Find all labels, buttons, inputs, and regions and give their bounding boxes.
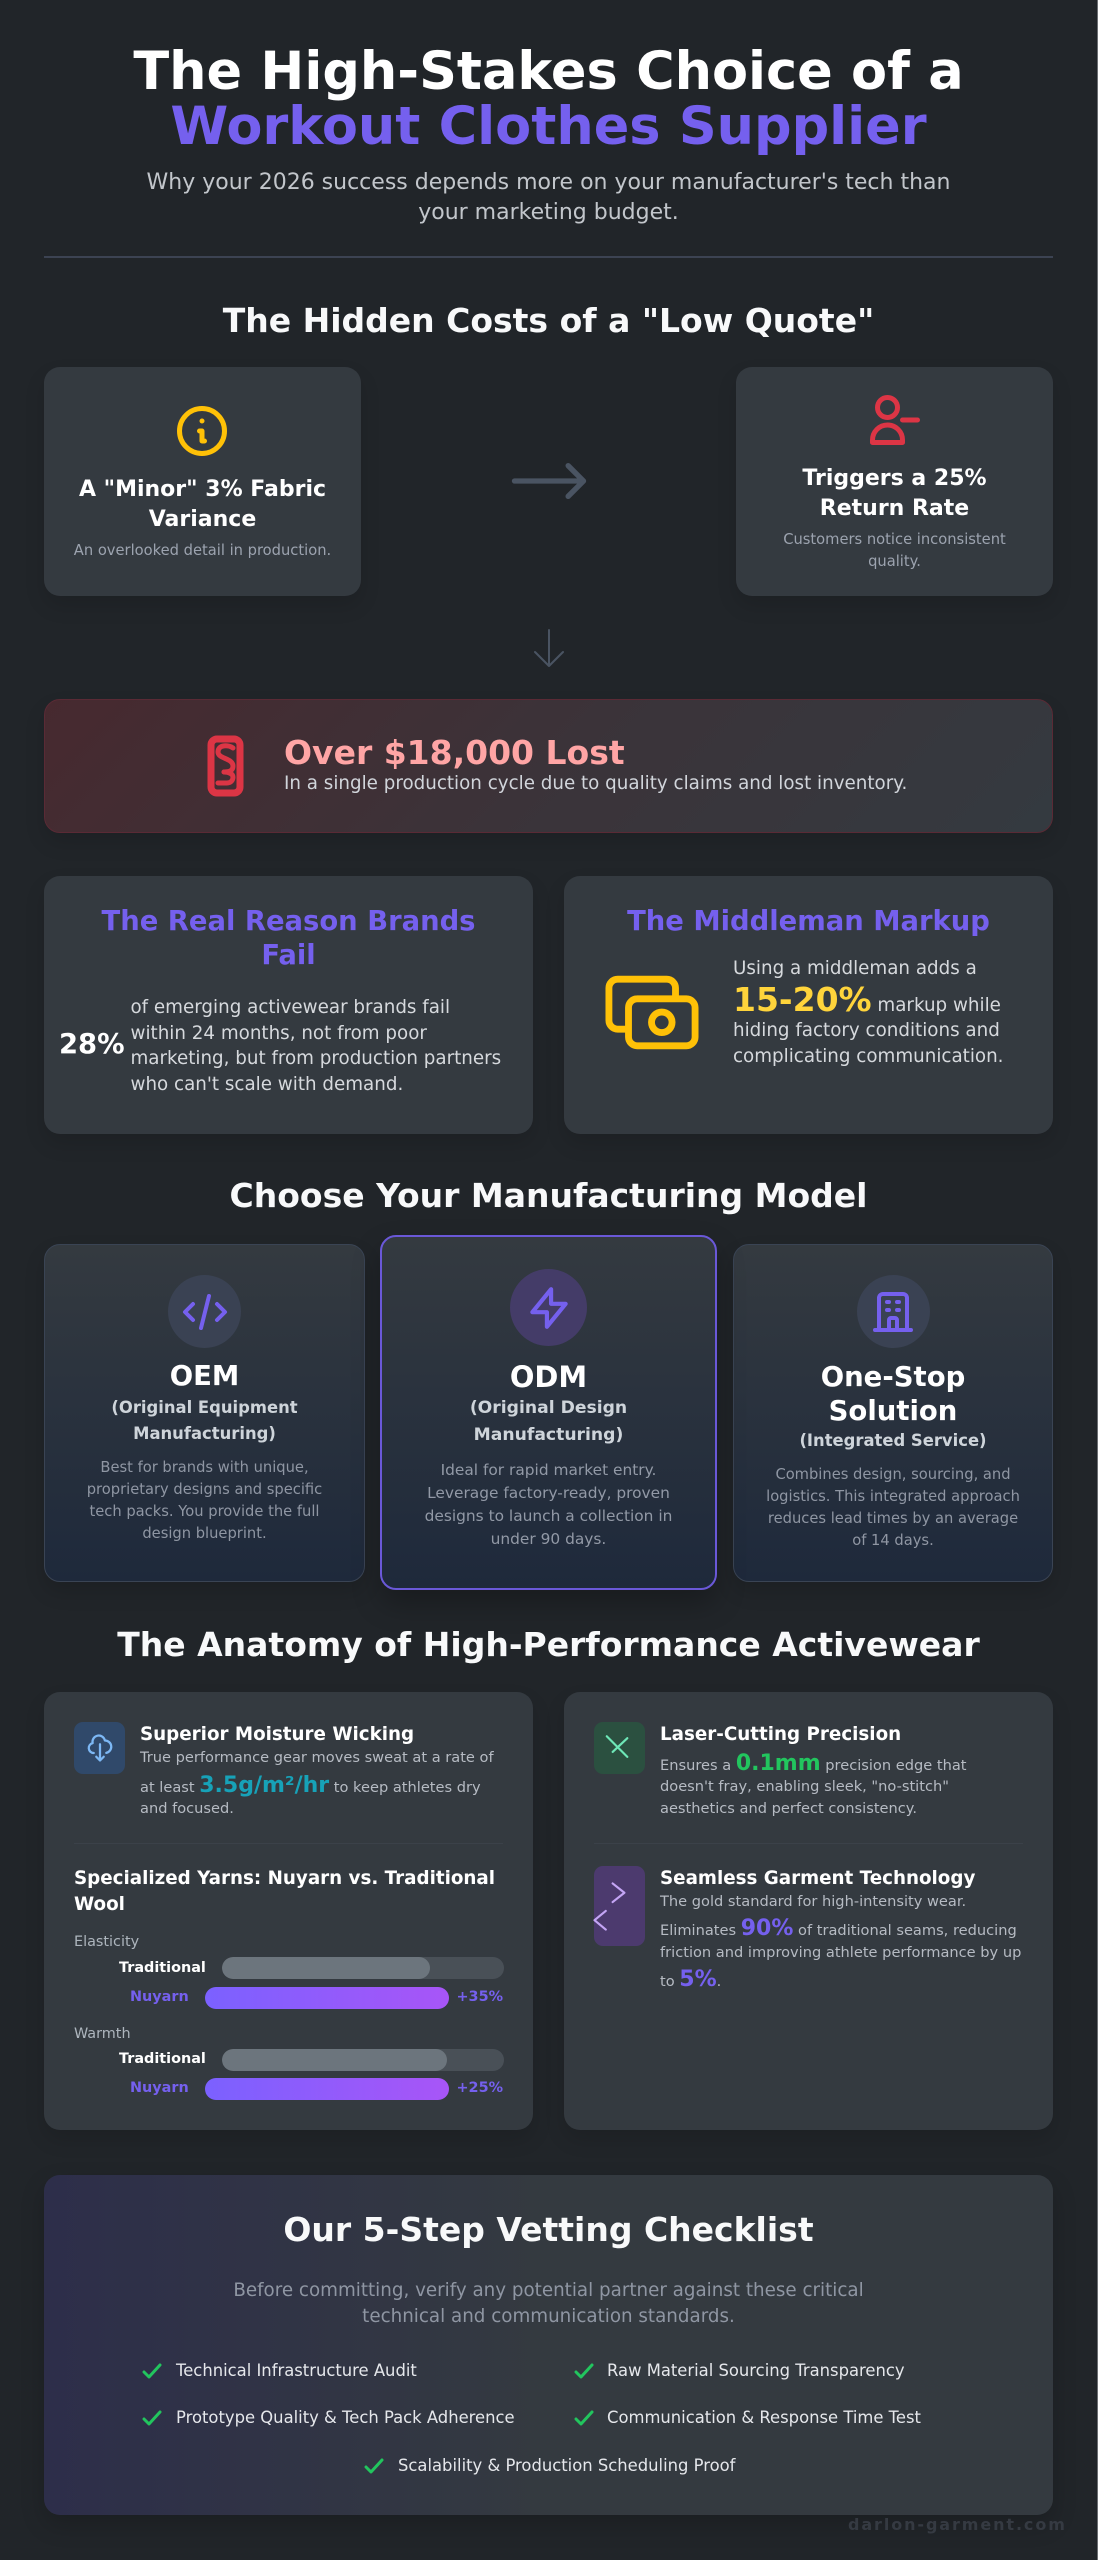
name bbox=[821, 1361, 965, 1427]
heading: anatomy: The Anatomy of High-Performance Activewear bbox=[117, 1625, 980, 1664]
card heading: A "Minor" 3% Fabric bbox=[79, 477, 326, 502]
feature text: at least 3.5g/m²/hr to keep athletes dry bbox=[140, 1773, 481, 1798]
subtitle: (Original Design bbox=[470, 1398, 627, 1418]
check item: Raw Material Sourcing Transparency bbox=[607, 2361, 905, 2380]
intro text: technical and communication standards. bbox=[362, 2306, 735, 2326]
description: design blueprint. bbox=[142, 1525, 267, 1542]
description: Ideal for rapid market entry. bbox=[441, 1461, 656, 1479]
panel: fabric performance bbox=[44, 1692, 533, 2130]
text: Using a middleman adds a bbox=[733, 958, 977, 979]
description: under 90 days. bbox=[491, 1530, 606, 1548]
description: proprietary designs and specific bbox=[87, 1481, 322, 1498]
feature text: Ensures a 0.1mm precision edge that bbox=[660, 1751, 967, 1776]
feature text: doesn't fray, enabling sleek, "no-stitch" bbox=[660, 1778, 949, 1795]
subtitle: Manufacturing) bbox=[133, 1424, 276, 1443]
check item: Communication & Response Time Test bbox=[607, 2408, 921, 2427]
description bbox=[87, 1459, 322, 1542]
panel: One-Stop bbox=[733, 1244, 1053, 1582]
bar chart: warmth: +25% bbox=[456, 2080, 503, 2096]
description: reduces lead times by an average bbox=[768, 1510, 1018, 1527]
bar chart: warmth: Traditional bbox=[119, 2051, 206, 2067]
card text: quality. bbox=[868, 553, 921, 570]
feature title: Superior Moisture Wicking bbox=[140, 1724, 414, 1745]
card heading bbox=[79, 477, 326, 532]
intro text: Before committing, verify any potential partner against these critical bbox=[233, 2280, 864, 2301]
title: Workout Clothes Supplier bbox=[170, 96, 927, 157]
card heading: Variance bbox=[149, 507, 256, 532]
card heading: Triggers a 25% bbox=[802, 466, 987, 491]
bar chart: elasticity: +35% bbox=[456, 1989, 503, 2005]
subtitle bbox=[111, 1398, 298, 1443]
subtitle bbox=[147, 170, 950, 225]
description bbox=[766, 1466, 1020, 1549]
panel: OEM bbox=[44, 1244, 365, 1582]
description: Best for brands with unique, bbox=[100, 1459, 309, 1476]
panel: vetting checklist bbox=[44, 2175, 1053, 2515]
bar chart: elasticity bbox=[74, 1934, 504, 2009]
feature text: Eliminates 90% of traditional seams, reducing bbox=[660, 1916, 1017, 1941]
text: of emerging activewear brands fail bbox=[130, 997, 450, 1018]
text bbox=[130, 997, 501, 1095]
icon: seamless bbox=[594, 1866, 645, 1946]
panel: real reason brands fail bbox=[44, 876, 533, 1134]
chart heading: Wool bbox=[74, 1894, 125, 1915]
loss text: In a single production cycle due to quality claims and lost inventory. bbox=[284, 773, 907, 794]
description: of 14 days. bbox=[852, 1532, 934, 1549]
subtitle: Why your 2026 success depends more on your manufacturer's tech than bbox=[147, 170, 950, 195]
panel: middleman markup bbox=[564, 876, 1053, 1134]
bar chart: warmth: Warmth bbox=[74, 2026, 131, 2042]
description: designs to launch a collection in bbox=[425, 1507, 672, 1525]
card heading: Return Rate bbox=[820, 496, 969, 521]
icon: cash bbox=[606, 976, 698, 1050]
description bbox=[425, 1461, 672, 1548]
feature text bbox=[660, 1893, 1021, 1992]
arrow: down bbox=[534, 629, 564, 667]
card text: Customers notice inconsistent bbox=[783, 531, 1006, 548]
title: The High-Stakes Choice of a bbox=[133, 41, 964, 102]
text bbox=[733, 1020, 1004, 1067]
text: who can't scale with demand. bbox=[130, 1074, 403, 1095]
stat: 28%: 28% bbox=[59, 1029, 125, 1060]
icon: user minus bbox=[870, 395, 920, 445]
bar chart: elasticity: Nuyarn bbox=[130, 1989, 189, 2005]
subtitle: Manufacturing) bbox=[474, 1425, 623, 1445]
title bbox=[133, 41, 964, 157]
name: Solution bbox=[829, 1395, 957, 1427]
card text: An overlooked detail in production. bbox=[74, 542, 331, 559]
bar chart: warmth: Nuyarn bbox=[130, 2080, 189, 2096]
icon: building bbox=[856, 1275, 930, 1348]
text: complicating communication. bbox=[733, 1046, 1004, 1067]
name: OEM bbox=[170, 1360, 239, 1392]
icon: code bbox=[168, 1275, 241, 1348]
card heading bbox=[802, 466, 987, 521]
heading: hidden costs: The Hidden Costs of a "Low Quote" bbox=[223, 301, 874, 340]
heading bbox=[102, 906, 475, 971]
text: within 24 months, not from poor bbox=[130, 1023, 427, 1044]
text: marketing, but from production partners bbox=[130, 1048, 501, 1069]
feature text: The gold standard for high-intensity wear. bbox=[660, 1893, 966, 1910]
heading: The Real Reason Brands bbox=[102, 906, 475, 937]
feature text: aesthetics and perfect consistency. bbox=[660, 1800, 917, 1817]
description: Leverage factory-ready, proven bbox=[427, 1484, 670, 1502]
bar chart: elasticity: Traditional bbox=[119, 1960, 206, 1976]
chart heading bbox=[74, 1868, 495, 1915]
feature text: to 5%. bbox=[660, 1967, 721, 1992]
feature title: Laser-Cutting Precision bbox=[660, 1724, 901, 1745]
subtitle bbox=[470, 1398, 627, 1445]
feature text: True performance gear moves sweat at a rate of bbox=[140, 1749, 494, 1766]
feature text bbox=[140, 1749, 494, 1817]
check item: Prototype Quality & Tech Pack Adherence bbox=[176, 2408, 515, 2427]
card text bbox=[783, 531, 1006, 570]
icon: laser cut bbox=[594, 1722, 645, 1774]
bar chart: elasticity: Elasticity bbox=[74, 1934, 139, 1950]
icon: lightning bbox=[510, 1269, 587, 1346]
heading: Fail bbox=[261, 940, 316, 971]
subtitle: (Integrated Service) bbox=[799, 1431, 987, 1450]
name: ODM bbox=[510, 1360, 587, 1394]
icon: dollar bbox=[208, 736, 244, 796]
check item: Scalability & Production Scheduling Proof bbox=[398, 2456, 735, 2475]
panel: construction tech bbox=[564, 1692, 1053, 2130]
panel: fabric variance bbox=[44, 367, 361, 596]
description: tech packs. You provide the full bbox=[90, 1503, 319, 1520]
check item: Technical Infrastructure Audit bbox=[176, 2361, 417, 2380]
icon: cloud download bbox=[74, 1722, 125, 1774]
feature text: friction and improving athlete performance by up bbox=[660, 1944, 1021, 1961]
arrow: right bbox=[512, 463, 586, 499]
panel: return rate bbox=[736, 367, 1053, 596]
text: hiding factory conditions and bbox=[733, 1020, 1000, 1041]
feature text: and focused. bbox=[140, 1800, 234, 1817]
panel: ODM bbox=[380, 1235, 717, 1590]
heading: manufacturing model: Choose Your Manufacturing Model bbox=[230, 1176, 867, 1215]
description: logistics. This integrated approach bbox=[766, 1488, 1020, 1505]
description: Combines design, sourcing, and bbox=[775, 1466, 1011, 1483]
loss figure: Over $18,000 Lost bbox=[284, 733, 625, 772]
panel: money lost bbox=[44, 699, 1053, 833]
subtitle: your marketing budget. bbox=[418, 200, 679, 225]
intro text bbox=[233, 2280, 864, 2326]
stat: 15-20%: 15-20% markup while bbox=[733, 980, 1001, 1019]
icon: info bbox=[177, 406, 227, 456]
chart heading: Specialized Yarns: Nuyarn vs. Traditional bbox=[74, 1868, 495, 1889]
subtitle: (Original Equipment bbox=[111, 1398, 298, 1417]
name: One-Stop bbox=[821, 1361, 965, 1393]
watermark: darlon-garment.com bbox=[848, 2515, 1067, 2534]
feature title: Seamless Garment Technology bbox=[660, 1868, 975, 1889]
heading: Our 5-Step Vetting Checklist bbox=[283, 2210, 814, 2249]
bar chart: warmth bbox=[74, 2026, 504, 2100]
feature text bbox=[660, 1751, 967, 1817]
heading: The Middleman Markup bbox=[627, 906, 990, 937]
